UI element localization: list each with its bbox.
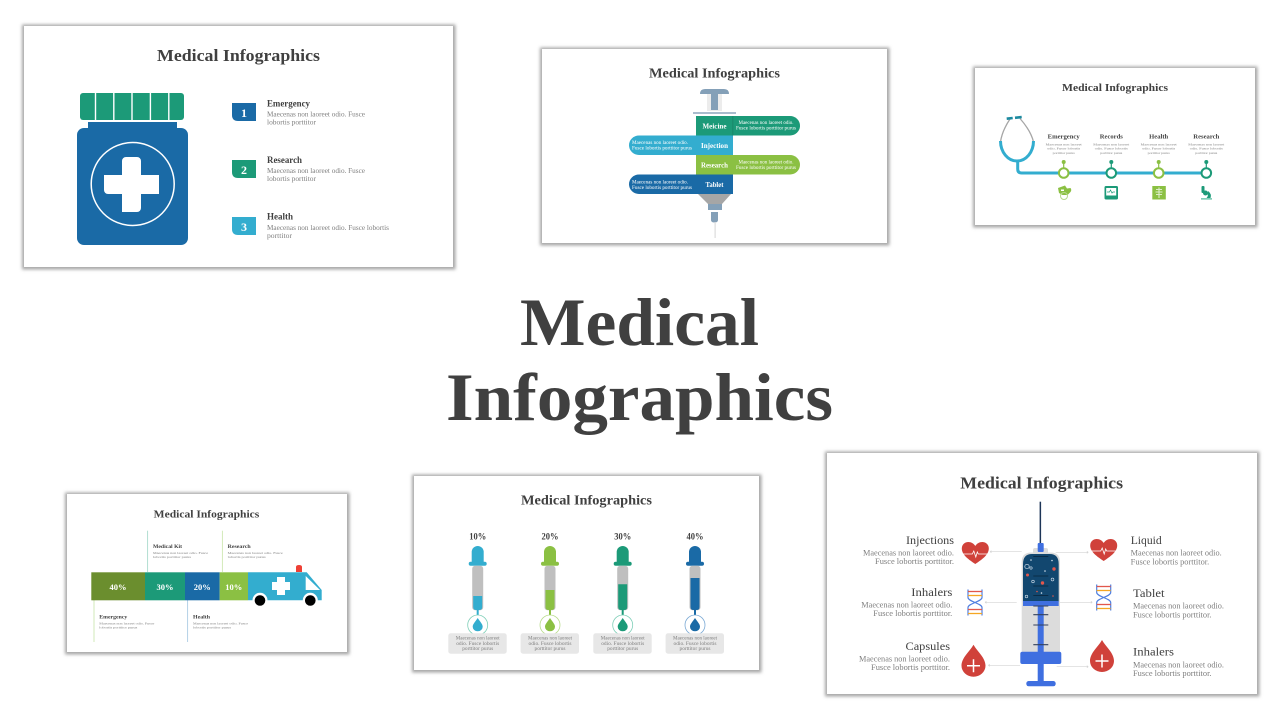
item: emergency: 1 xyxy=(241,106,247,120)
timeline: emergency xyxy=(1046,133,1082,178)
dropper: 30%: porttitor purus xyxy=(607,647,638,652)
icon: dna left xyxy=(968,590,982,616)
label: health: lobortis porttitor purus xyxy=(193,626,232,630)
row: medicine: Maecenas non laoreet odio. xyxy=(738,121,794,126)
label: tablet: Fusce lobortis porttitor. xyxy=(1133,610,1212,619)
row: tablet xyxy=(629,174,733,194)
label: research: lobortis porttitor purus xyxy=(228,555,266,559)
row: injection xyxy=(629,136,733,155)
dropper: 40%: 40% xyxy=(686,533,704,543)
timeline: research: Maecenas non laoreet xyxy=(1188,142,1224,146)
timeline: research: odio. Fusce lobortis xyxy=(1190,147,1224,151)
timeline: health: Maecenas non laoreet xyxy=(1141,142,1177,146)
row: injection: Fusce lobortis porttitor purus xyxy=(632,146,692,152)
label: medical kit: Medical Kit xyxy=(153,544,182,550)
label: liquid xyxy=(1131,533,1222,566)
bar: 30% xyxy=(145,572,185,600)
item: research: Maecenas non laoreet odio. Fusce xyxy=(267,166,366,175)
label: tablet: Tablet xyxy=(1133,586,1165,600)
item: research xyxy=(232,155,366,183)
bar: 10%: 10% xyxy=(225,582,242,592)
label: capsules xyxy=(859,639,950,672)
panel: stethoscope timeline slide xyxy=(973,66,1258,228)
timeline: emergency: odio. Fusce lobortis xyxy=(1047,147,1081,151)
bar: 10% xyxy=(220,572,248,600)
label: medical kit: Maecenas non laoreet odio. Fusce xyxy=(153,551,209,555)
timeline: research xyxy=(1188,133,1224,178)
label: emergency: lobortis porttitor purus xyxy=(99,626,138,630)
label: injections: Fusce lobortis porttitor. xyxy=(875,557,954,566)
timeline: health: Health xyxy=(1149,133,1169,140)
dropper: 40%: porttitor purus xyxy=(680,647,711,652)
dropper: 10%: porttitor purus xyxy=(462,647,493,652)
panel: syringe list slide xyxy=(540,48,890,246)
label: health: Maecenas non laoreet odio. Fusce xyxy=(193,622,249,626)
label: inhalers left: Fusce lobortis porttitor. xyxy=(873,609,952,618)
row: tablet: Maecenas non laoreet odio. xyxy=(632,180,688,186)
item: research: lobortis porttitor xyxy=(267,174,316,183)
label: liquid: Maecenas non laoreet odio. xyxy=(1131,549,1222,558)
timeline: health: odio. Fusce lobortis xyxy=(1142,147,1176,151)
row: medicine xyxy=(696,116,800,136)
label: tablet xyxy=(1133,586,1224,619)
label: research: Research xyxy=(228,544,251,550)
item: emergency: lobortis porttitor xyxy=(267,118,316,126)
timeline: emergency: Emergency xyxy=(1048,133,1080,140)
item: health: porttitor xyxy=(267,231,292,240)
dropper: 30%: 30% xyxy=(614,533,631,543)
icon: medicine bottle xyxy=(77,93,188,245)
label: inhalers right xyxy=(1133,645,1224,678)
label: health xyxy=(193,615,249,630)
timeline: records: Records xyxy=(1100,133,1123,140)
timeline: records: porttitor purus xyxy=(1100,151,1123,155)
item: research: 2 xyxy=(241,163,247,177)
row: injection: Injection xyxy=(701,142,728,150)
dropper: 30% xyxy=(593,533,652,654)
label: medical kit xyxy=(153,544,209,559)
dropper: 30%: odio. Fusce lobortis xyxy=(601,642,644,647)
item: emergency xyxy=(232,98,366,126)
bar: 30%: 30% xyxy=(156,582,174,592)
icon: blood drop left xyxy=(962,645,986,677)
label: capsules: Capsules xyxy=(906,639,950,653)
row: medicine: Fusce lobortis porttitor purus xyxy=(736,126,796,132)
bar: 40% xyxy=(91,572,145,600)
item: health: Health xyxy=(267,212,293,222)
heading: Medical Infographics xyxy=(649,66,781,81)
dropper: 20%: odio. Fusce lobortis xyxy=(528,642,572,647)
row: research xyxy=(696,155,800,174)
dropper: 40%: Maecenas non laoreet xyxy=(673,637,718,642)
label: injections: Injections xyxy=(906,533,954,547)
label: medical kit: lobortis porttitor purus xyxy=(153,555,192,559)
dropper: 20%: 20% xyxy=(542,533,558,543)
dropper: 10% xyxy=(448,533,507,654)
timeline: emergency: Maecenas non laoreet xyxy=(1046,142,1082,146)
icon: monitor xyxy=(1104,186,1118,200)
heading: Medical Infographics xyxy=(157,46,320,65)
label: research: Maecenas non laoreet odio. Fusce xyxy=(228,551,283,555)
leader lines xyxy=(94,531,222,642)
panel: medicine bottle slide xyxy=(22,24,456,270)
row: tablet: Fusce lobortis porttitor purus xyxy=(632,186,692,191)
dropper: 30%: Maecenas non laoreet xyxy=(601,637,645,642)
dropper: 20%: Maecenas non laoreet xyxy=(528,637,573,642)
timeline: emergency: porttitor purus xyxy=(1053,151,1075,155)
timeline: research: Research xyxy=(1193,133,1220,140)
row: research: Fusce lobortis porttitor purus xyxy=(736,166,796,171)
icon: ambulance xyxy=(248,565,322,608)
panel: ambulance bar slide xyxy=(65,492,350,654)
label: research xyxy=(228,544,283,559)
label: inhalers right: Maecenas non laoreet odio. xyxy=(1133,660,1224,669)
item: health: 3 xyxy=(241,220,247,234)
dropper: 40% xyxy=(666,533,724,654)
label: inhalers right: Fusce lobortis porttitor. xyxy=(1133,669,1212,678)
panel: large syringe slide xyxy=(825,452,1260,696)
item: emergency: Maecenas non laoreet odio. Fusce xyxy=(267,110,366,118)
icon: x-ray xyxy=(1152,186,1166,200)
icon: syringe plunger xyxy=(693,89,736,114)
row: injection: Maecenas non laoreet odio. xyxy=(632,141,688,146)
dropper: 20% xyxy=(521,533,579,654)
main title: Medical xyxy=(520,284,759,360)
bar: 20%: 20% xyxy=(194,582,211,592)
label: health: Health xyxy=(193,615,210,621)
timeline: records xyxy=(1093,133,1129,178)
icon: heart left xyxy=(962,542,989,564)
icon: dna right xyxy=(1097,584,1111,610)
label: emergency: Emergency xyxy=(99,615,128,621)
item: health: Maecenas non laoreet odio. Fusce lobortis xyxy=(267,223,389,232)
label: inhalers left: Maecenas non laoreet odio. xyxy=(861,600,952,609)
icon: medical bag xyxy=(1058,186,1071,200)
label: injections: Maecenas non laoreet odio. xyxy=(863,548,954,557)
row: medicine: Meicine xyxy=(702,122,726,130)
label: capsules: Fusce lobortis porttitor. xyxy=(871,663,950,672)
label: capsules: Maecenas non laoreet odio. xyxy=(859,654,950,663)
item: health xyxy=(232,212,389,240)
icon: microscope xyxy=(1201,186,1212,200)
heading: Medical Infographics xyxy=(521,493,653,508)
timeline: records: Maecenas non laoreet xyxy=(1093,142,1129,146)
item: emergency: Emergency xyxy=(267,98,310,108)
icon: stethoscope and timeline line xyxy=(1000,117,1206,173)
main title xyxy=(446,284,833,435)
dropper: 10%: Maecenas non laoreet xyxy=(456,637,500,642)
heading: Medical Infographics xyxy=(154,509,260,521)
dropper: 20%: porttitor purus xyxy=(534,647,566,652)
heading: Medical Infographics xyxy=(960,474,1123,493)
bar: 20% xyxy=(185,572,220,600)
item: research: Research xyxy=(267,155,302,165)
timeline: research: porttitor purus xyxy=(1195,151,1218,155)
label: emergency: Maecenas non laoreet odio. Fusce xyxy=(99,622,155,626)
bar: 40%: 40% xyxy=(110,582,126,592)
dropper: 10%: odio. Fusce lobortis xyxy=(456,642,499,647)
main title: Infographics xyxy=(446,359,833,435)
label: emergency xyxy=(99,615,155,630)
heading: Medical Infographics xyxy=(1062,82,1169,94)
label: injections xyxy=(863,533,954,566)
icon: syringe xyxy=(1020,502,1061,686)
row: research: Research xyxy=(701,162,728,170)
label: tablet: Maecenas non laoreet odio. xyxy=(1133,602,1224,611)
label: liquid: Fusce lobortis porttitor. xyxy=(1131,557,1209,566)
row: tablet: Tablet xyxy=(706,181,724,189)
timeline: health: porttitor purus xyxy=(1148,151,1170,155)
icon: blood drop right xyxy=(1090,640,1114,672)
label: inhalers left: Inhalers xyxy=(911,585,953,599)
label: liquid: Liquid xyxy=(1131,533,1162,547)
icon: syringe tip xyxy=(698,194,731,238)
timeline: records: odio. Fusce lobortis xyxy=(1095,147,1129,151)
panel: droppers slide xyxy=(412,474,762,672)
row: research: Maecenas non laoreet odio. xyxy=(738,160,794,166)
label: inhalers right: Inhalers xyxy=(1133,645,1174,659)
dropper: 40%: odio. Fusce lobortis xyxy=(674,642,717,647)
dropper: 10%: 10% xyxy=(469,533,486,543)
icon: heart right xyxy=(1090,539,1117,561)
timeline: health xyxy=(1141,133,1177,178)
label: inhalers left xyxy=(861,585,953,618)
connector arrows xyxy=(985,551,1092,668)
